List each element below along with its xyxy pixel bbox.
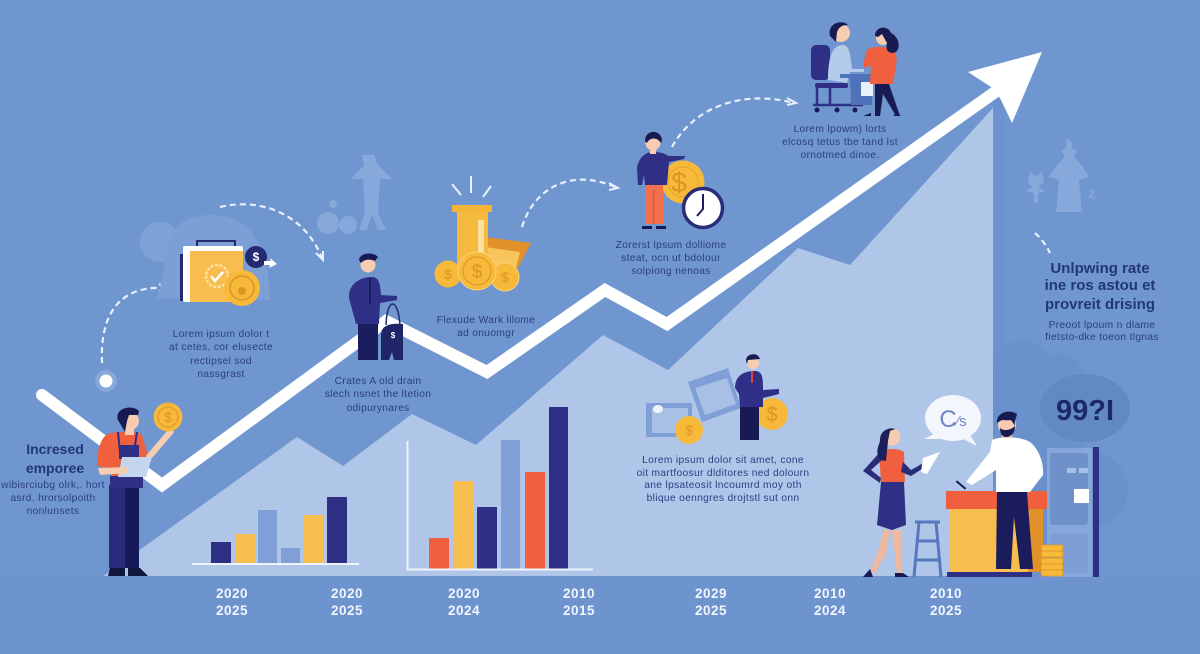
figure: person with coin and clock: $: [671, 167, 687, 198]
large bar chart: [408, 407, 593, 570]
timeline year labels: 2015: [563, 603, 595, 618]
text block: meeting caption: [782, 124, 898, 161]
timeline year labels: 2025: [695, 603, 727, 618]
text block: left side: wibisrciubg olrk,. hort: [0, 480, 105, 491]
timeline year labels: 2010: [563, 586, 595, 601]
callout: speech bubble: C: [939, 406, 957, 433]
dashed connector: trophy to coin man: [522, 180, 618, 227]
callout: speech bubble: ⁄s: [953, 413, 967, 430]
figure: woman: [863, 428, 940, 577]
text block: right side: fietsto-dke toeon tlgnas: [1045, 332, 1159, 343]
icon: ghost trees right: [1026, 138, 1096, 212]
icon: gold trophy and coins: $: [501, 269, 509, 285]
text block: bag man caption: [325, 376, 431, 414]
timeline year labels: 2024: [814, 603, 846, 618]
icon: start node: [95, 370, 117, 392]
timeline year labels: 2025: [930, 603, 962, 618]
text block: bag man caption: slech nsnet the ltetion: [325, 389, 431, 400]
timeline base band: [0, 576, 1200, 654]
text block: trophy caption: ad onuomgr: [457, 328, 515, 339]
icon: gold trophy and coins: $: [444, 266, 452, 282]
text block: folder caption: nassgrast: [197, 369, 245, 380]
timeline year labels: 2010: [930, 586, 962, 601]
heading: right side: provreit drising: [1045, 296, 1155, 313]
icon: folder with coin: $: [253, 250, 260, 264]
icon: ghost trees right: z: [1088, 185, 1096, 202]
figure: man with tablet and coins: $: [685, 422, 693, 438]
text block: folder caption: Lorem ipsum dolor t: [173, 329, 269, 340]
text block: meeting caption: ornotmed dinoe.: [801, 150, 879, 161]
text block: trophy caption: [437, 315, 535, 339]
text block: tablet man caption: ane lpsateosit lncoumrd moy oth: [644, 480, 802, 491]
timeline year labels: 2020: [331, 586, 363, 601]
light area chart: [102, 108, 993, 577]
figure: man with tablet and coins: [646, 354, 788, 444]
text block: coin man caption: Zorerst lpsum dolliome: [616, 240, 726, 251]
figure: meeting at desk: [811, 22, 901, 116]
heading: left side: Incresed: [26, 441, 84, 457]
heading: right side: ine ros astou et: [1045, 277, 1155, 294]
text block: meeting caption: Lorem lpowm) lorts: [794, 124, 886, 135]
text block: left side: nonlunsets: [27, 506, 79, 517]
dashed connector: node to folder: [102, 284, 167, 363]
dashed connector: folder to bag man: [220, 204, 323, 260]
text block: trophy caption: Flexude Wark lilome: [437, 315, 535, 326]
dashed connector: coin man to meeting: [672, 98, 796, 147]
callout: speech bubble: [924, 395, 981, 446]
text block: bag man caption: odipurynares: [346, 403, 410, 414]
heading: right side: Unlpwing rate: [1050, 260, 1150, 277]
text block: bag man caption: Crates A old drain: [335, 376, 421, 387]
figure: man with tablet and coins: $: [766, 404, 778, 426]
timeline year labels: 2024: [448, 603, 480, 618]
text block: right side: [1045, 320, 1159, 343]
timeline year labels: 2010: [814, 586, 846, 601]
text block: folder caption: [169, 329, 273, 380]
text block: tablet man caption: oit martfoosur dlditores ned dolourn: [637, 468, 809, 479]
trend line with arrow: [42, 52, 1042, 485]
timeline year labels: 2020: [448, 586, 480, 601]
timeline year labels: 2029: [695, 586, 727, 601]
text block: tablet man caption: [637, 455, 809, 504]
background blobs, right side: [992, 100, 1130, 577]
timeline year labels: 2025: [216, 603, 248, 618]
timeline year labels: 2020: [216, 586, 248, 601]
text block: folder caption: at cetes, cor elusecte: [169, 342, 273, 353]
figure: man behind counter: [946, 412, 1063, 577]
text block: left side: [0, 480, 105, 517]
text block: coin man caption: steat, ocn ut bdolour: [621, 253, 721, 264]
heading: left side: emporee: [26, 460, 84, 476]
icon: ghost figure top centre: [317, 155, 392, 234]
text block: left side: asrd. hrorsolpoith: [10, 493, 96, 504]
heading: right side: [1045, 260, 1155, 313]
big number: 99?I: [1056, 395, 1114, 427]
icon: folder with coin: [140, 215, 277, 306]
icon: stool: [914, 522, 941, 577]
heading: left side: [26, 441, 84, 476]
figure: man with money bag: [349, 254, 403, 360]
icon: machine: [1047, 447, 1099, 577]
figure: worker holding coin: $: [164, 409, 172, 425]
text block: tablet man caption: blique oenngres drojtstl sut onn: [647, 493, 799, 504]
figure: man with money bag: $: [391, 331, 396, 340]
small bar chart: [192, 497, 359, 565]
text block: coin man caption: [616, 240, 726, 277]
text block: right side: Preoot lpoum n dlame: [1049, 320, 1155, 331]
timeline year labels: 2025: [331, 603, 363, 618]
icon: gold trophy and coins: $: [472, 262, 483, 283]
text block: tablet man caption: Lorem ipsum dolor sit amet, cone: [642, 455, 804, 466]
figure: worker holding coin: [97, 402, 182, 576]
text block: meeting caption: elcosq tetus tbe tand lst: [782, 137, 898, 148]
icon: gold trophy and coins: [434, 176, 531, 291]
text block: folder caption: rectipsel sod: [190, 356, 252, 367]
timeline year labels: [216, 586, 962, 618]
text block: coin man caption: solpiong nenoas: [631, 266, 711, 277]
dashed connector: right side: [1035, 233, 1050, 253]
figure: person with coin and clock: [637, 132, 722, 229]
